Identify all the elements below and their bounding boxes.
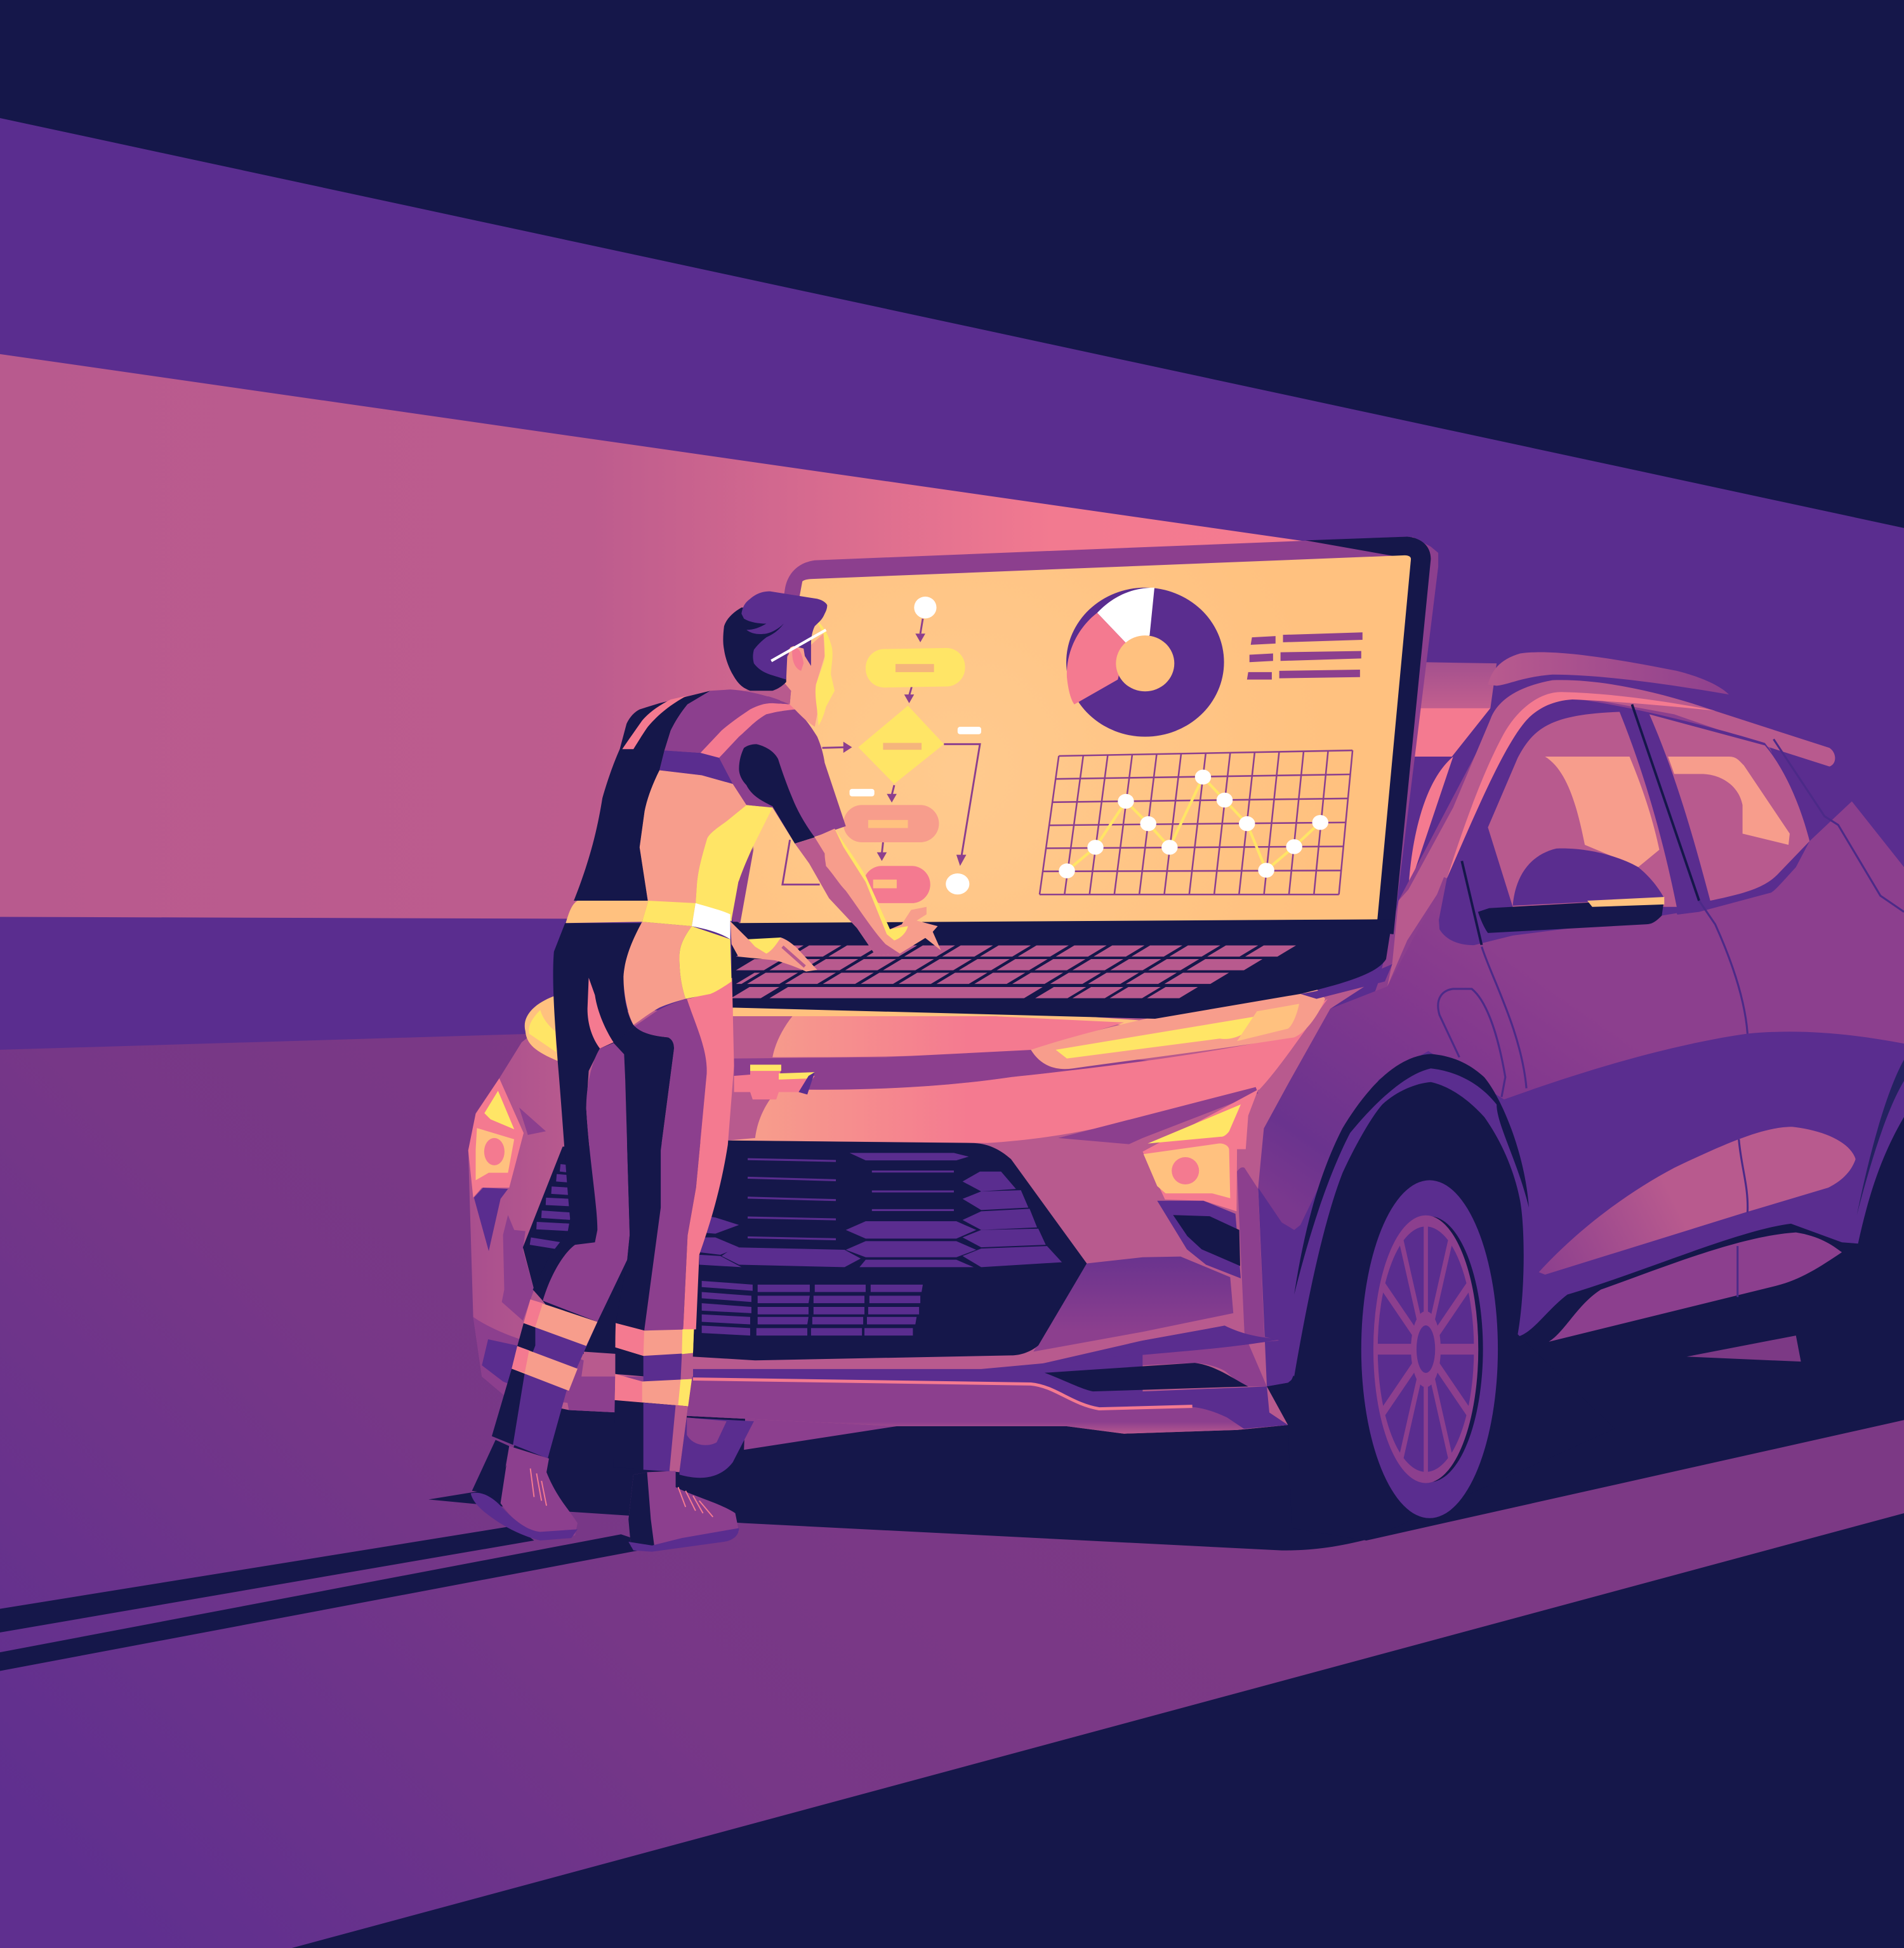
donut white segment xyxy=(1097,588,1154,644)
sleeve inner xyxy=(739,744,815,844)
tyre inner xyxy=(687,1417,727,1445)
laptop base xyxy=(732,919,1392,1019)
pillar seam a xyxy=(1462,861,1482,945)
hair dark xyxy=(723,607,795,691)
left body vent xyxy=(519,1108,546,1135)
chart data points xyxy=(1059,770,1328,878)
torso purple sliver xyxy=(732,847,754,923)
back shoe xyxy=(501,1446,578,1539)
grille xyxy=(523,1141,1087,1360)
rear arch highlight xyxy=(1857,1060,1904,1215)
flow process pill xyxy=(865,647,965,688)
screen xyxy=(739,555,1411,923)
roof top rail xyxy=(1488,652,1729,694)
right headlight housing xyxy=(1031,989,1325,1069)
rear window interior glow xyxy=(1668,757,1790,845)
neck shade xyxy=(744,682,791,705)
front shin lower purple xyxy=(644,1403,688,1472)
mirror base xyxy=(1478,898,1664,933)
grille left slats xyxy=(531,1168,571,1246)
front shin lower pink xyxy=(670,1405,688,1472)
sweep xyxy=(976,1325,1282,1367)
front shin lower xyxy=(614,1400,688,1472)
process pill label xyxy=(896,664,934,672)
flow end node xyxy=(946,873,969,894)
chart legend lines xyxy=(1247,632,1363,680)
tyre xyxy=(1361,1180,1498,1518)
hair purple xyxy=(741,592,827,680)
flow decision diamond xyxy=(858,706,944,784)
bumper band xyxy=(584,1325,1225,1379)
left hand finger line xyxy=(783,946,805,967)
chest band xyxy=(659,750,733,784)
flow tag two xyxy=(850,789,875,797)
lower body shade xyxy=(1033,1257,1233,1352)
badge top xyxy=(750,1064,781,1071)
upper hood xyxy=(772,1016,1124,1057)
rear window xyxy=(1649,714,1809,901)
fender vertical strip xyxy=(1142,1167,1279,1386)
sill and rear arch xyxy=(1366,1117,1904,1541)
front fender xyxy=(1258,894,1726,1230)
grille upper lines xyxy=(748,1159,954,1239)
upper back purple xyxy=(664,689,790,753)
windshield lower xyxy=(1398,757,1453,894)
flow arrowheads xyxy=(843,633,967,866)
front window xyxy=(1488,712,1677,907)
laptop bezel dark side xyxy=(1306,537,1431,934)
donut pink segment xyxy=(1067,613,1127,705)
left body shade xyxy=(502,1215,534,1321)
torso skin xyxy=(640,771,746,905)
flow connector lines xyxy=(783,619,980,885)
front leg band upper pink xyxy=(615,1323,644,1356)
decision label xyxy=(883,743,922,750)
right arm yellow edge xyxy=(835,828,908,941)
ear xyxy=(792,647,803,671)
back leg dark stripe xyxy=(492,1323,535,1445)
sill highlight xyxy=(1549,1233,1842,1342)
back leg band lower xyxy=(512,1346,578,1391)
pink roof highlight xyxy=(1447,692,1716,878)
badge top right xyxy=(779,1072,815,1080)
background: purple wall band xyxy=(0,118,1904,1429)
back shoe dark xyxy=(472,1440,509,1495)
tyre outer xyxy=(679,1417,754,1478)
mirror dome xyxy=(1513,849,1664,906)
back shoe sole xyxy=(471,1493,578,1541)
a-pillar pink xyxy=(1408,757,1453,889)
hip yellow xyxy=(679,926,732,999)
body slot xyxy=(1058,1087,1258,1144)
left lamp block xyxy=(476,1128,514,1180)
chart grid xyxy=(1040,750,1352,894)
window frame xyxy=(1437,697,1809,948)
flow tag one xyxy=(958,727,981,734)
roof lower rail xyxy=(1441,680,1835,878)
left marker top xyxy=(525,997,559,1061)
right arm xyxy=(795,828,941,955)
laptop outer edge xyxy=(1378,537,1438,936)
left lamp housing xyxy=(468,1078,524,1198)
flowchart xyxy=(783,597,981,903)
left hand yellow xyxy=(748,938,781,953)
bumper lip xyxy=(562,1377,1288,1434)
back leg pink sliver xyxy=(588,977,614,1049)
donut purple segment xyxy=(1066,588,1224,737)
grille hex bars xyxy=(699,1153,1062,1267)
back leg band lower pink xyxy=(512,1346,529,1373)
pink pill label xyxy=(873,880,897,888)
front leg dark stripe xyxy=(614,1026,674,1330)
chart series line xyxy=(1067,777,1320,871)
front leg band upper xyxy=(615,1323,694,1356)
left bumper insert xyxy=(482,1339,534,1391)
right fog lamp block xyxy=(1144,1144,1230,1198)
right arm shade xyxy=(795,837,900,955)
hood tan stripe xyxy=(733,1007,1153,1025)
keyboard xyxy=(740,951,1286,993)
lower hood xyxy=(728,999,1328,1143)
flow salmon pill xyxy=(843,805,939,842)
ground shadow under car xyxy=(428,1242,1904,1551)
door reflection xyxy=(1539,1127,1856,1275)
arch outer shadow xyxy=(1294,1054,1529,1294)
side mirror xyxy=(1478,849,1664,933)
rim spokes xyxy=(1375,1219,1477,1479)
front leg band lower accent xyxy=(678,1379,692,1407)
grille lower bars xyxy=(702,1281,923,1335)
left lower bumper xyxy=(473,1317,584,1404)
badge edge xyxy=(798,1072,815,1094)
shirt strap xyxy=(701,703,795,758)
front shoe xyxy=(628,1471,739,1549)
left lamp yellow xyxy=(484,1090,514,1129)
car side body xyxy=(1242,689,1904,1367)
wheel well xyxy=(1267,1082,1615,1541)
back leg and hip dark xyxy=(533,923,642,1301)
front body xyxy=(468,972,1387,1434)
hair side yellow xyxy=(816,620,835,726)
donut chart xyxy=(1066,588,1224,737)
salmon pill label xyxy=(868,820,908,828)
road sliver under body xyxy=(1687,1335,1801,1362)
windshield glow xyxy=(1417,662,1497,708)
torso yellow xyxy=(696,805,772,921)
shoulder strip xyxy=(622,696,687,749)
bumper dark slot xyxy=(1045,1363,1248,1391)
front leg pink stripe xyxy=(683,977,734,1330)
front shin accent xyxy=(680,1353,693,1381)
back leg band upper pink xyxy=(524,1299,543,1327)
back leg band upper xyxy=(524,1299,597,1346)
front shoe laces xyxy=(678,1487,713,1517)
car: front wheel xyxy=(1267,1054,1615,1541)
badge face xyxy=(734,1068,815,1099)
right fog lamp dot xyxy=(1172,1157,1199,1184)
back leg centre xyxy=(543,1043,630,1322)
road wedge behind bumper xyxy=(744,1416,897,1450)
right fog lamp yellow xyxy=(1147,1104,1241,1144)
belt tan xyxy=(565,901,649,923)
person shadow strip one xyxy=(0,1526,534,1633)
lower door panel xyxy=(1258,1031,1904,1386)
light beam from the screen xyxy=(0,354,1316,919)
torso dark side xyxy=(574,691,710,901)
flow start node xyxy=(914,597,937,618)
right lower vent xyxy=(1157,1201,1241,1278)
left marker yellow xyxy=(529,1010,557,1052)
flow pink pill xyxy=(863,866,930,903)
right fog lamp housing xyxy=(1142,1090,1258,1211)
belt white xyxy=(692,903,731,939)
belt yellow xyxy=(642,901,696,926)
right vent inner xyxy=(1173,1215,1240,1266)
car: front end xyxy=(468,972,1387,1434)
front shin purple xyxy=(644,1353,692,1381)
rim shadow xyxy=(1376,1216,1483,1482)
laptop xyxy=(732,537,1438,1019)
right headlight yellow xyxy=(1055,1015,1264,1059)
front shin dark xyxy=(615,1348,693,1381)
front leg band upper accent xyxy=(682,1329,694,1354)
windshield pink band xyxy=(1415,708,1490,757)
front leg purple stripe xyxy=(635,999,707,1330)
chevrolet bowtie badge xyxy=(734,1064,815,1099)
pelvis skin xyxy=(623,922,692,1025)
a-pillar xyxy=(1387,696,1552,986)
base side trim xyxy=(1300,964,1392,999)
person shadow strip two xyxy=(0,1534,658,1671)
line chart xyxy=(1040,750,1352,894)
door seams xyxy=(1438,739,1904,1297)
donut centre xyxy=(1116,635,1174,691)
lower strip xyxy=(1142,1278,1245,1341)
fender wrap xyxy=(1237,972,1387,1188)
back leg lower xyxy=(492,1299,597,1459)
sleeve xyxy=(719,710,846,844)
hood crease xyxy=(734,1050,1153,1092)
front shoe dark heel xyxy=(628,1472,654,1548)
front leg band lower pink xyxy=(615,1374,642,1403)
right headlight amber xyxy=(1237,1004,1299,1041)
back shoe laces xyxy=(531,1468,546,1506)
left hand xyxy=(731,922,817,972)
glasses arm xyxy=(771,630,826,661)
bumper air dam xyxy=(693,1354,1288,1429)
front shoe sole xyxy=(628,1528,739,1552)
laptop bezel xyxy=(732,537,1431,944)
left lamp lens xyxy=(474,1188,508,1251)
face xyxy=(784,633,824,727)
pillar seam front xyxy=(1632,705,1699,901)
bumper pink line xyxy=(693,1379,1193,1409)
left lamp dot xyxy=(484,1138,505,1165)
person xyxy=(471,592,941,1552)
car: side and rear xyxy=(1242,652,1904,1541)
front window interior glow xyxy=(1545,757,1659,867)
road surface xyxy=(0,1031,1904,1948)
car: hidden front tyre xyxy=(679,1416,897,1478)
mirror indicator xyxy=(1587,897,1664,907)
front leg band lower xyxy=(615,1374,692,1407)
